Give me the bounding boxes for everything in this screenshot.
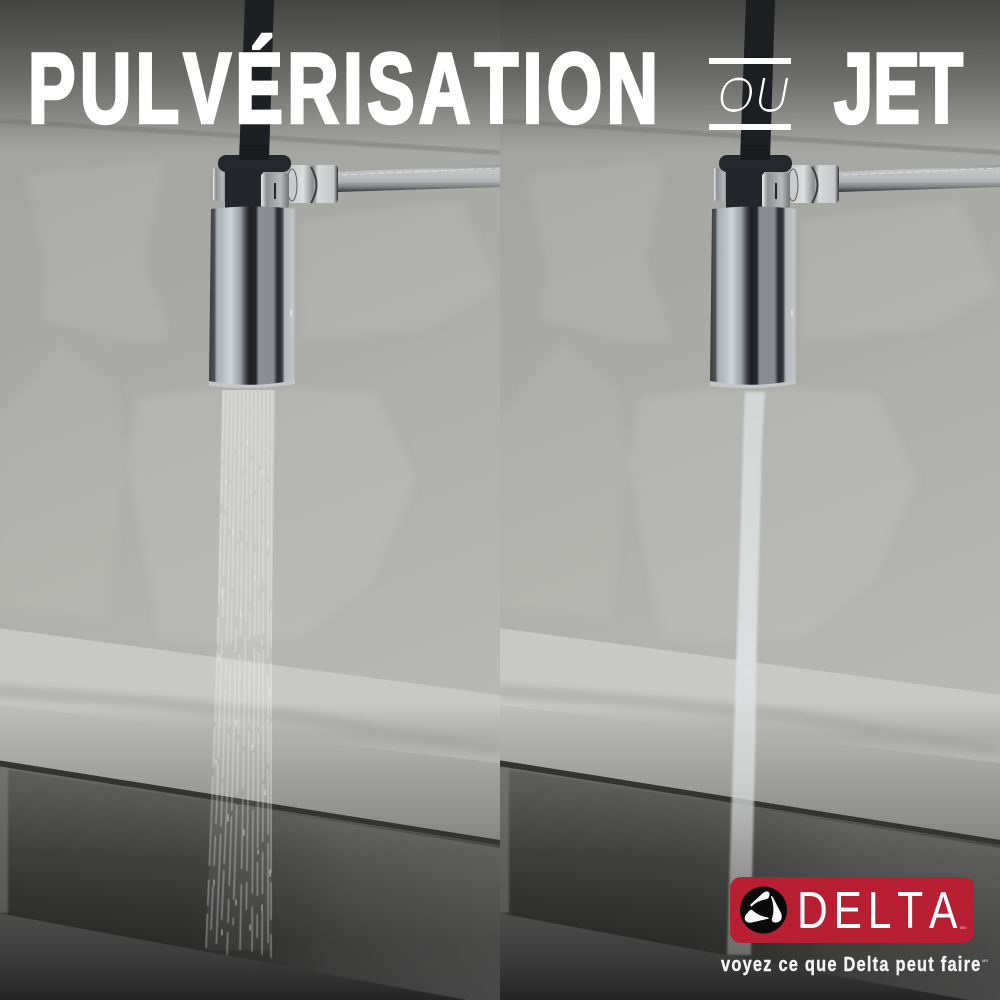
panel: spray mode photo (0, 0, 500, 1000)
water stream (727, 392, 765, 955)
title: Pulvérisation: PULVÉRISATION (28, 33, 662, 144)
wordmark: DELTA (797, 882, 963, 940)
panel: stream mode photo (498, 0, 1000, 1000)
water spray (205, 390, 275, 958)
tagline: voyez ce que Delta peut faire (721, 952, 982, 975)
title: Jet: JET (834, 34, 963, 144)
title connector: ou: OU (717, 67, 790, 123)
title connector: ou (709, 58, 791, 130)
registered mark: MD (960, 925, 966, 930)
tagline: MS (982, 958, 988, 963)
icon: Delta emblem (740, 886, 787, 934)
logo: Delta badge (730, 877, 974, 943)
